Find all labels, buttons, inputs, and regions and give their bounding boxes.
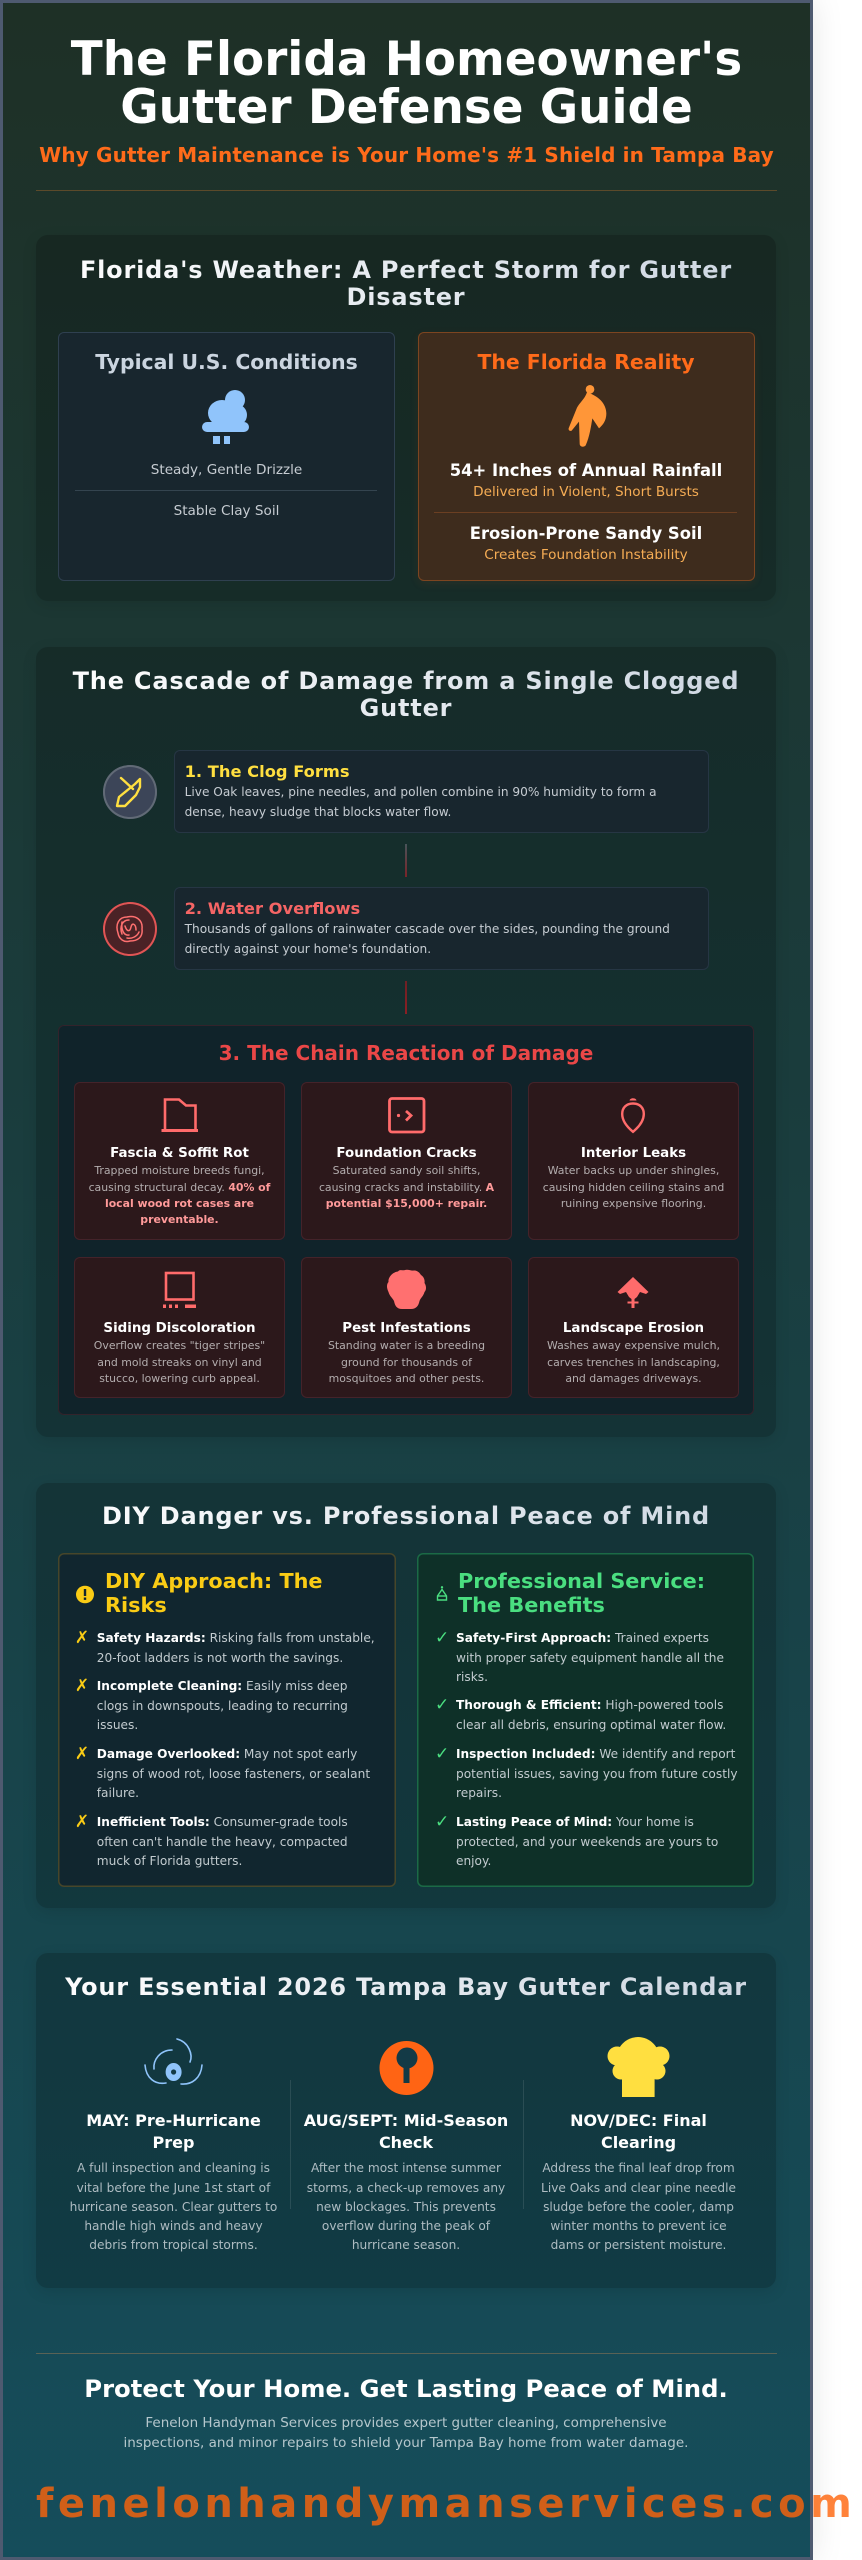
card text xyxy=(543,1164,724,1210)
heading: professional: Professional Service: xyxy=(458,1569,705,1593)
month text: vital before the June 1st start of xyxy=(77,2181,270,2195)
month title: Check xyxy=(379,2133,433,2152)
card text: local wood rot cases are xyxy=(105,1197,254,1210)
column: may xyxy=(70,2038,277,2252)
card: pests xyxy=(301,1257,512,1398)
website url: fenelonhandymanservices.com xyxy=(36,2481,856,2527)
card text: Standing water is a breeding xyxy=(328,1339,485,1352)
icon: storm figure xyxy=(568,385,606,447)
benefit item: with proper safety equipment handle all the xyxy=(456,1651,724,1665)
risk item: issues. xyxy=(97,1718,138,1732)
card: water overflows xyxy=(174,887,709,970)
text: bursts: Delivered in Violent, Short Bursts xyxy=(473,484,699,500)
benefit item: ✓ xyxy=(435,1812,449,1832)
card text: Overflow creates "tiger stripes" xyxy=(94,1339,265,1352)
heading: professional xyxy=(458,1569,705,1617)
call to action text xyxy=(36,2414,776,2453)
card title: Foundation Cracks xyxy=(336,1146,477,1161)
month text: Address the final leaf drop from xyxy=(542,2161,735,2175)
text: sandy soil: Erosion-Prone Sandy Soil xyxy=(470,524,702,543)
card text: Trapped moisture breeds fungi, xyxy=(94,1164,265,1177)
step text xyxy=(184,922,670,956)
heading: cascade: The Cascade of Damage from a Single Clogged xyxy=(73,667,739,695)
text: instability: Creates Foundation Instability xyxy=(484,547,688,563)
card: clog forms xyxy=(174,750,709,833)
heading: chain reaction: 3. The Chain Reaction of Damage xyxy=(219,1041,593,1065)
benefit item xyxy=(435,1812,718,1868)
panel: chain reaction xyxy=(58,1025,754,1415)
month title: MAY: Pre-Hurricane xyxy=(86,2111,261,2130)
heading: typical: Typical U.S. Conditions xyxy=(95,350,358,374)
risk item xyxy=(75,1744,370,1800)
card text xyxy=(319,1164,494,1210)
card title: Pest Infestations xyxy=(342,1321,471,1336)
step 1 xyxy=(103,750,709,833)
benefit item: Thorough & Efficient: High-powered tools xyxy=(456,1698,723,1712)
risk item: 20-foot ladders is not worth the savings. xyxy=(97,1651,343,1665)
month text: hurricane season. Clear gutters to xyxy=(70,2200,277,2214)
card text: ground for thousands of xyxy=(341,1356,472,1369)
card title: Fascia & Soffit Rot xyxy=(110,1146,249,1161)
card: erosion xyxy=(528,1257,739,1398)
card text: causing structural decay. 40% of xyxy=(89,1181,270,1194)
icon: overflow xyxy=(103,902,157,956)
heading: cascade xyxy=(36,668,776,722)
month text: winter months to prevent ice xyxy=(550,2219,727,2233)
risk item: Incomplete Cleaning: Easily miss deep xyxy=(97,1679,347,1693)
icon: crack xyxy=(388,1097,426,1134)
heading: professional: The Benefits xyxy=(458,1593,605,1617)
card title: Siding Discoloration xyxy=(103,1321,256,1336)
benefit item: Safety-First Approach: Trained experts xyxy=(456,1631,709,1645)
risk item: ✗ xyxy=(75,1676,89,1696)
card text: Saturated sandy soil shifts, xyxy=(333,1164,480,1177)
text: drizzle: Steady, Gentle Drizzle xyxy=(151,462,302,478)
panel: professional xyxy=(417,1553,754,1887)
card: siding xyxy=(74,1257,285,1398)
month text: dams or persistent moisture. xyxy=(551,2238,726,2252)
icon: tree xyxy=(604,2035,673,2099)
panel: cascade of damage xyxy=(36,647,776,1437)
icon: clog xyxy=(103,765,157,819)
risk item: signs of wood rot, loose fasteners, or sealant xyxy=(97,1767,370,1781)
risk item: often can't handle the heavy, compacted xyxy=(97,1835,348,1849)
card text: stucco, lowering curb appeal. xyxy=(99,1372,260,1385)
call to action text: inspections, and minor repairs to shield your Tampa Bay home from water damage. xyxy=(124,2435,688,2451)
heading: calendar: Your Essential 2026 Tampa Bay Gutter Calendar xyxy=(65,1973,747,2001)
icon: siding xyxy=(163,1272,196,1308)
step text: Thousands of gallons of rainwater cascade over the sides, pounding the ground xyxy=(185,922,670,936)
icon: folder xyxy=(162,1098,198,1132)
card text xyxy=(547,1339,720,1385)
month title: Prep xyxy=(153,2133,194,2152)
title: The Florida Homeowner's xyxy=(71,33,742,87)
icon: leak xyxy=(621,1098,645,1134)
benefit item xyxy=(435,1744,738,1800)
heading: cascade: Gutter xyxy=(360,694,452,722)
benefit item: ✓ xyxy=(435,1628,449,1648)
icon: keyhole xyxy=(380,2041,434,2095)
risk item: ✗ xyxy=(75,1628,89,1648)
month title xyxy=(528,2110,748,2154)
benefit item: Inspection Included: We identify and report xyxy=(456,1747,735,1761)
month text: storms, a check-up removes any xyxy=(307,2181,505,2195)
text: clay soil: Stable Clay Soil xyxy=(174,503,279,519)
card: interior leaks xyxy=(528,1082,739,1240)
risk item: Inefficient Tools: Consumer-grade tools xyxy=(97,1815,348,1829)
card text: preventable. xyxy=(140,1213,219,1226)
card text xyxy=(89,1164,270,1226)
title: Gutter Defense Guide xyxy=(120,81,693,135)
month title xyxy=(86,2111,261,2152)
card text: and mold streaks on vinyl and xyxy=(97,1356,262,1369)
panel: florida reality xyxy=(418,332,754,581)
step text: Live Oak leaves, pine needles, and pollen combine in 90% humidity to form a xyxy=(185,785,657,799)
month text: sludge before the cooler, damp xyxy=(543,2200,734,2214)
icon: technician xyxy=(436,1586,448,1601)
heading: diy: DIY Approach: The xyxy=(105,1569,323,1593)
month title xyxy=(304,2111,508,2152)
heading: weather: Florida's Weather: A Perfect Storm for Gutter xyxy=(80,256,732,284)
month text: overflow during the peak of xyxy=(322,2219,490,2233)
risk item: muck of Florida gutters. xyxy=(97,1854,242,1868)
panel: calendar xyxy=(36,1953,776,2288)
card: fascia rot xyxy=(74,1082,285,1240)
card text: Water backs up under shingles, xyxy=(548,1164,719,1177)
risk item xyxy=(75,1628,375,1665)
month text: debris from tropical storms. xyxy=(89,2238,258,2252)
icon: warning xyxy=(76,1586,94,1604)
card text: potential $15,000+ repair. xyxy=(326,1197,487,1210)
month title: Clearing xyxy=(601,2133,676,2152)
risk item: failure. xyxy=(97,1786,139,1800)
card text: Washes away expensive mulch, xyxy=(547,1339,720,1352)
subtitle: Why Gutter Maintenance is Your Home's #1 Shield in Tampa Bay xyxy=(39,143,774,167)
month text xyxy=(70,2161,277,2252)
card title: Interior Leaks xyxy=(581,1146,686,1161)
benefit item: ✓ xyxy=(435,1744,449,1764)
heading: diy vs pro: DIY Danger vs. Professional Peace of Mind xyxy=(102,1502,710,1530)
month text xyxy=(528,2159,748,2255)
column: nov/dec xyxy=(528,2033,748,2253)
icon: hurricane xyxy=(144,2038,203,2085)
benefit item xyxy=(435,1628,724,1684)
heading: diy: Risks xyxy=(105,1593,167,1617)
month text: A full inspection and cleaning is xyxy=(77,2161,270,2175)
panel: diy xyxy=(58,1553,396,1887)
call to action text: Fenelon Handyman Services provides expert gutter cleaning, comprehensive xyxy=(145,2415,667,2431)
heading: diy xyxy=(105,1569,323,1617)
card text xyxy=(328,1339,485,1385)
panel: florida weather xyxy=(36,235,776,601)
card text: causing hidden ceiling stains and xyxy=(543,1181,724,1194)
panel: diy vs professional xyxy=(36,1483,776,1908)
risk item: ✗ xyxy=(75,1812,89,1832)
step title: 1. The Clog Forms xyxy=(185,762,350,781)
column: aug/sept xyxy=(304,2041,508,2252)
heading: reality: The Florida Reality xyxy=(477,350,695,374)
heading: weather xyxy=(36,257,776,311)
panel: typical conditions xyxy=(58,332,395,581)
step 2 xyxy=(103,887,709,970)
card text: mosquitoes and other pests. xyxy=(329,1372,484,1385)
month title: NOV/DEC: Final xyxy=(570,2111,707,2130)
month text xyxy=(307,2161,505,2252)
card text xyxy=(94,1339,265,1385)
icon: pest xyxy=(387,1270,426,1309)
month text: Live Oaks and clear pine needle xyxy=(541,2181,736,2195)
month text: new blockages. This prevents xyxy=(316,2200,496,2214)
benefit item: enjoy. xyxy=(456,1854,491,1868)
card text: ruining expensive flooring. xyxy=(561,1197,706,1210)
benefit item: repairs. xyxy=(456,1786,502,1800)
icon: erosion xyxy=(618,1277,648,1308)
risk item: Safety Hazards: Risking falls from unstable, xyxy=(97,1631,375,1645)
card text: carves trenches in landscaping, xyxy=(547,1356,720,1369)
benefit item: risks. xyxy=(456,1670,488,1684)
benefit item: protected, and your weekends are yours to xyxy=(456,1835,718,1849)
risk item: Damage Overlooked: May not spot early xyxy=(97,1747,357,1761)
card: foundation cracks xyxy=(301,1082,512,1240)
risk item: clogs in downspouts, leading to recurring xyxy=(97,1699,348,1713)
step text: dense, heavy sludge that blocks water flow. xyxy=(185,805,451,819)
card text: causing cracks and instability. A xyxy=(319,1181,494,1194)
risk item xyxy=(75,1812,348,1868)
step title: 2. Water Overflows xyxy=(185,899,360,918)
risk item xyxy=(75,1676,348,1732)
benefit item: potential issues, saving you from future costly xyxy=(456,1767,738,1781)
month text: handle high winds and heavy xyxy=(84,2219,263,2233)
month text: After the most intense summer xyxy=(311,2161,501,2175)
benefit item: clear all debris, ensuring optimal water flow. xyxy=(456,1718,726,1732)
card title: Landscape Erosion xyxy=(563,1321,704,1336)
risk item: ✗ xyxy=(75,1744,89,1764)
benefit item xyxy=(435,1695,726,1732)
step text: directly against your home's foundation. xyxy=(185,942,431,956)
call to action heading: Protect Your Home. Get Lasting Peace of Mind. xyxy=(84,2374,728,2403)
header xyxy=(39,33,774,167)
benefit item: ✓ xyxy=(435,1695,449,1715)
month text: hurricane season. xyxy=(352,2238,460,2252)
footer xyxy=(36,2353,854,2543)
icon: drizzle cloud xyxy=(202,390,249,444)
heading: weather: Disaster xyxy=(347,283,465,311)
benefit item: Lasting Peace of Mind: Your home is xyxy=(456,1815,694,1829)
month title: AUG/SEPT: Mid-Season xyxy=(304,2111,508,2130)
text: rainfall: 54+ Inches of Annual Rainfall xyxy=(450,461,722,480)
step text xyxy=(185,785,657,819)
title xyxy=(70,33,742,135)
card text: and damages driveways. xyxy=(565,1372,702,1385)
